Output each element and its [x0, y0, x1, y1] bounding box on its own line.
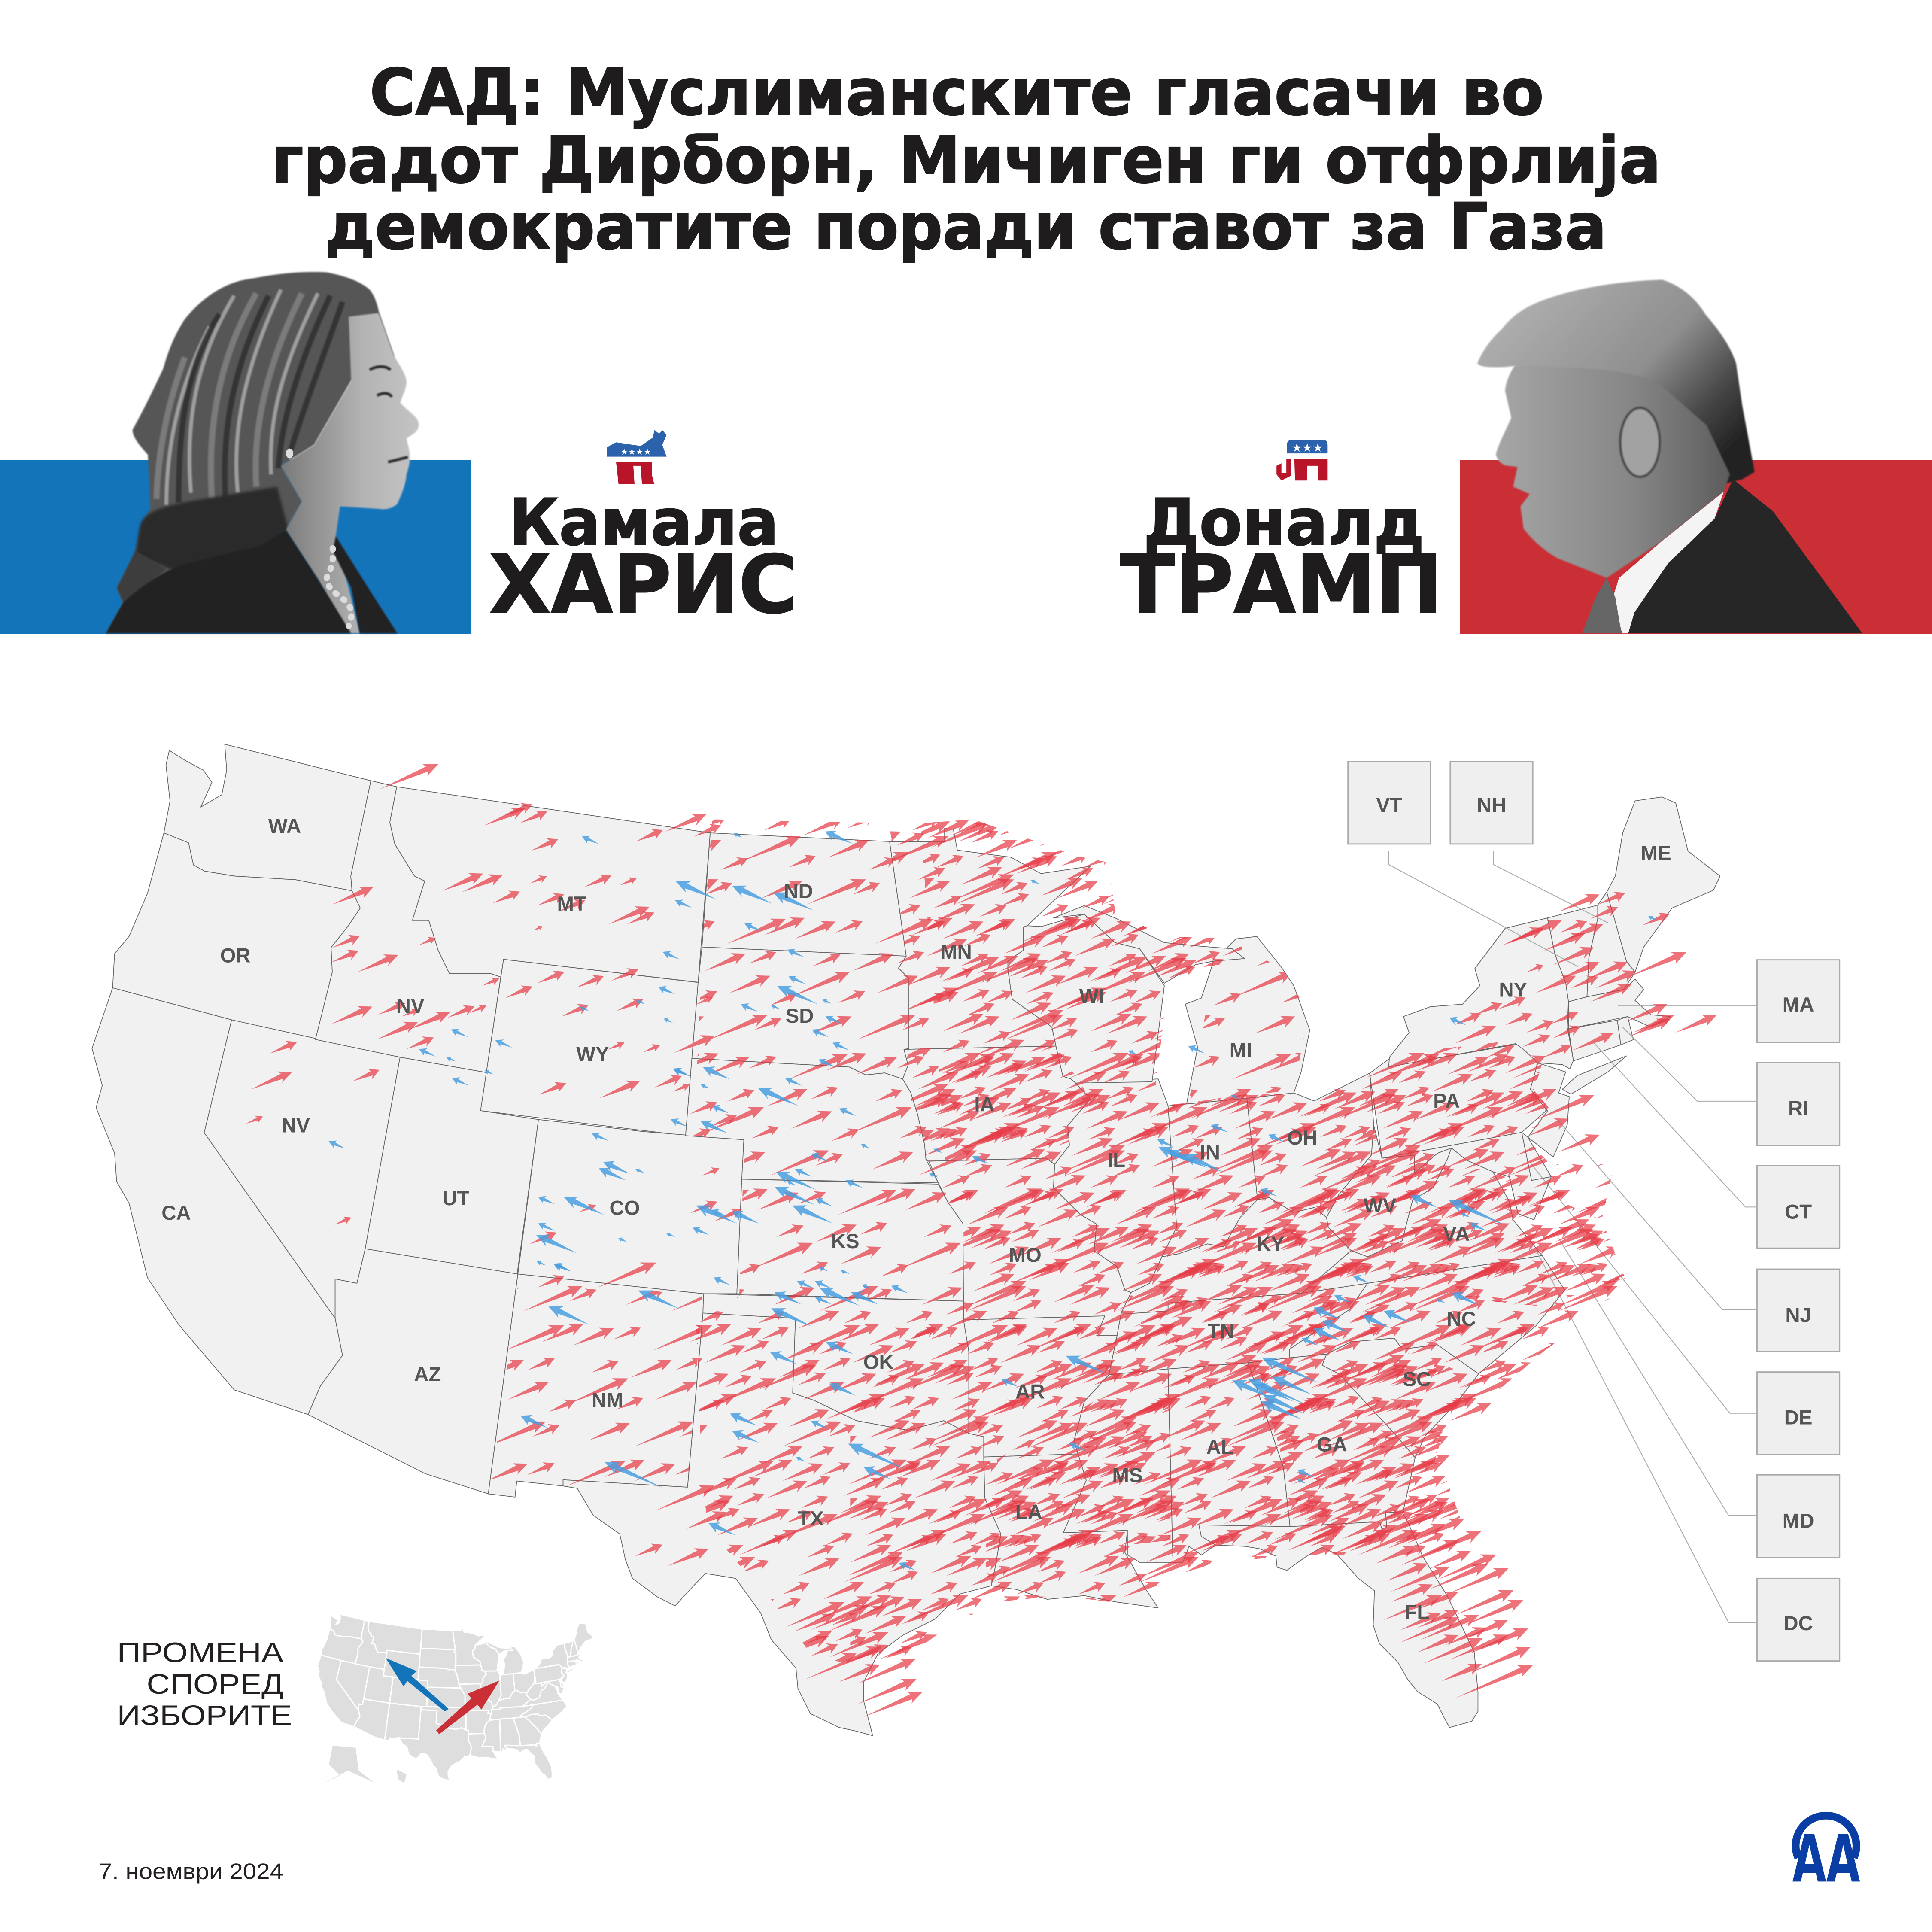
map: state labels: NY	[1499, 979, 1527, 1002]
state: Georgia	[1248, 1354, 1415, 1528]
title: демократите поради ставот за Газа	[325, 190, 1607, 264]
legend: label: СПОРЕД	[147, 1668, 283, 1700]
map: state labels: SC	[1403, 1368, 1431, 1391]
date: 7. ноември 2024	[99, 1859, 283, 1884]
legend: red arrow	[436, 1680, 499, 1734]
map: state labels: TX	[798, 1507, 824, 1530]
state: Wyoming	[480, 960, 698, 1136]
map: state labels: WV	[1364, 1194, 1397, 1217]
state: New Jersey	[1528, 1063, 1569, 1157]
state: North Carolina	[1290, 1255, 1565, 1374]
panel: Harris banner	[0, 460, 471, 634]
icon: Republican elephant: ★★★	[1291, 441, 1323, 455]
state: Virginia	[1302, 1148, 1542, 1293]
state: Idaho	[316, 781, 501, 1072]
state: Delaware	[1522, 1132, 1551, 1180]
map: state labels: NV	[282, 1114, 310, 1137]
map: state labels: NV	[396, 995, 425, 1018]
legend: label: ИЗБОРИТЕ	[117, 1699, 292, 1731]
callout boxes: small northeastern states	[1348, 762, 1840, 1661]
callout boxes: small northeastern states: DE	[1784, 1406, 1813, 1429]
state: Arizona	[308, 1249, 518, 1494]
map: state labels: ND	[784, 880, 813, 903]
icon: Democratic donkey: ★★★★	[620, 447, 651, 457]
logo: Anadolu Agency	[1792, 1816, 1860, 1897]
map: leader lines	[1388, 851, 1757, 1623]
state: Maine	[1607, 797, 1720, 972]
map: state labels: KS	[831, 1230, 860, 1253]
state: Michigan lower	[1185, 936, 1310, 1104]
icon: Democratic donkey	[607, 430, 667, 484]
map: state labels: MS	[1112, 1464, 1142, 1487]
map: state labels: NC	[1447, 1308, 1476, 1331]
state: Florida	[1199, 1512, 1478, 1728]
map: state labels: NM	[592, 1389, 623, 1412]
map: state labels: MO	[1009, 1244, 1042, 1267]
state: Washington	[164, 744, 371, 891]
map: state labels: KY	[1256, 1233, 1285, 1255]
legend: label: ПРОМЕНА	[117, 1636, 283, 1668]
state: Colorado	[518, 1120, 744, 1294]
name: Donald Trump: Доналд	[1143, 485, 1425, 560]
name: Donald Trump	[1120, 485, 1443, 631]
state: Alabama	[1168, 1363, 1290, 1562]
map: state labels: ME	[1641, 842, 1671, 865]
callout boxes: small northeastern states: CT	[1785, 1200, 1812, 1223]
map: state labels: TN	[1208, 1320, 1235, 1343]
state: Montana	[390, 787, 710, 982]
state: Utah	[365, 1057, 538, 1274]
state: Minnesota	[890, 829, 1091, 1049]
map: state labels: WI	[1079, 985, 1104, 1008]
state: Nebraska	[686, 1058, 938, 1183]
state: Arkansas	[963, 1316, 1117, 1457]
state: Maryland	[1382, 1132, 1551, 1220]
state: Kentucky	[1121, 1198, 1351, 1313]
map: state labels: AL	[1206, 1436, 1233, 1458]
map: state labels: FL	[1404, 1601, 1429, 1624]
callout boxes: small northeastern states: VT	[1376, 794, 1402, 817]
state: Wisconsin	[1008, 914, 1164, 1083]
state: Illinois	[1054, 1079, 1177, 1293]
callout boxes: small northeastern states: RI	[1788, 1097, 1808, 1120]
chart: blue arrows shift to Harris	[327, 826, 1658, 1574]
state: Pennsylvania	[1370, 1044, 1548, 1158]
callout boxes: small northeastern states: DC	[1783, 1612, 1813, 1635]
map: state labels: SD	[786, 1005, 814, 1027]
state: Michigan upper	[1054, 905, 1245, 983]
state: South Carolina	[1322, 1338, 1479, 1458]
legend: mini map	[317, 1614, 593, 1784]
map: state labels: MN	[940, 941, 972, 963]
state: Iowa	[902, 1046, 1091, 1164]
callout boxes: small northeastern states: MD	[1783, 1510, 1814, 1533]
title: САД: Муслиманските гласачи во	[370, 55, 1544, 130]
map: state labels: WY	[576, 1043, 609, 1066]
state: Louisiana	[984, 1454, 1158, 1608]
state: New Mexico	[488, 1274, 704, 1497]
state: Vermont	[1548, 905, 1598, 1002]
name: Kamala Harris: Камала	[509, 485, 779, 560]
state: Massachusetts	[1568, 979, 1671, 1029]
map: state labels: OK	[863, 1351, 894, 1373]
legend: label	[117, 1636, 292, 1731]
state: Missouri	[929, 1158, 1131, 1336]
state: North Dakota	[702, 833, 906, 956]
name: Kamala Harris: ХАРИС	[489, 538, 797, 631]
state: Oregon	[112, 833, 360, 1039]
map: state labels: GA	[1317, 1434, 1347, 1456]
map: state labels: VA	[1443, 1223, 1470, 1245]
state: Ohio	[1247, 1073, 1374, 1217]
map: state labels: MI	[1230, 1039, 1252, 1062]
chart: red arrows shift to Trump	[244, 753, 1908, 1798]
legend: blue arrow	[386, 1658, 449, 1711]
map: state labels: WA	[268, 815, 301, 838]
map: state labels: PA	[1433, 1090, 1460, 1112]
name: Donald Trump: ТРАМП	[1120, 538, 1443, 631]
map: United States states	[92, 744, 1720, 1736]
map: state labels: LA	[1015, 1501, 1042, 1524]
callout boxes: small northeastern states: NJ	[1785, 1304, 1811, 1327]
state: New York	[1388, 918, 1574, 1069]
state: Kansas	[737, 1179, 963, 1301]
map: state labels: CO	[610, 1197, 640, 1220]
state: Texas	[563, 1313, 1001, 1736]
state: New Hampshire	[1587, 892, 1635, 997]
state: Long Island	[1562, 1056, 1626, 1094]
state: California	[92, 988, 343, 1415]
map: state labels	[161, 815, 1671, 1624]
state: Indiana	[1162, 1098, 1258, 1257]
state: South Dakota	[692, 947, 909, 1079]
map: state labels: OR	[220, 944, 251, 967]
panel: Trump banner	[1460, 460, 1932, 634]
state: Connecticut	[1568, 1020, 1621, 1061]
map: state labels: OH	[1287, 1127, 1318, 1149]
portrait: Harris	[106, 272, 419, 633]
map: state labels: CA	[161, 1202, 191, 1224]
map: state labels: IL	[1107, 1149, 1125, 1172]
map: state labels: MT	[557, 893, 586, 915]
state: West Virginia	[1327, 1126, 1452, 1257]
map: state labels: AR	[1015, 1380, 1045, 1403]
callout boxes: small northeastern states: MA	[1783, 993, 1814, 1016]
state: Tennessee	[1109, 1283, 1368, 1375]
state: Rhode Island	[1617, 1017, 1633, 1045]
title: градот Дирборн, Мичиген ги отфрлија	[271, 123, 1661, 198]
name: Kamala Harris	[489, 485, 797, 631]
icon: Republican elephant	[1276, 440, 1327, 480]
map: state labels: IN	[1200, 1142, 1220, 1164]
map: state labels: IA	[974, 1094, 995, 1116]
map: state labels: UT	[442, 1187, 469, 1210]
map: state labels: AZ	[414, 1363, 441, 1386]
logo: Anadolu Agency: AA	[1792, 1821, 1860, 1897]
state: Nevada	[204, 1020, 400, 1318]
state: Mississippi	[1063, 1369, 1173, 1562]
portrait: Trump	[1477, 279, 1862, 633]
callout boxes: small northeastern states: NH	[1477, 794, 1506, 817]
title	[271, 55, 1661, 264]
state: Oklahoma	[703, 1294, 969, 1434]
